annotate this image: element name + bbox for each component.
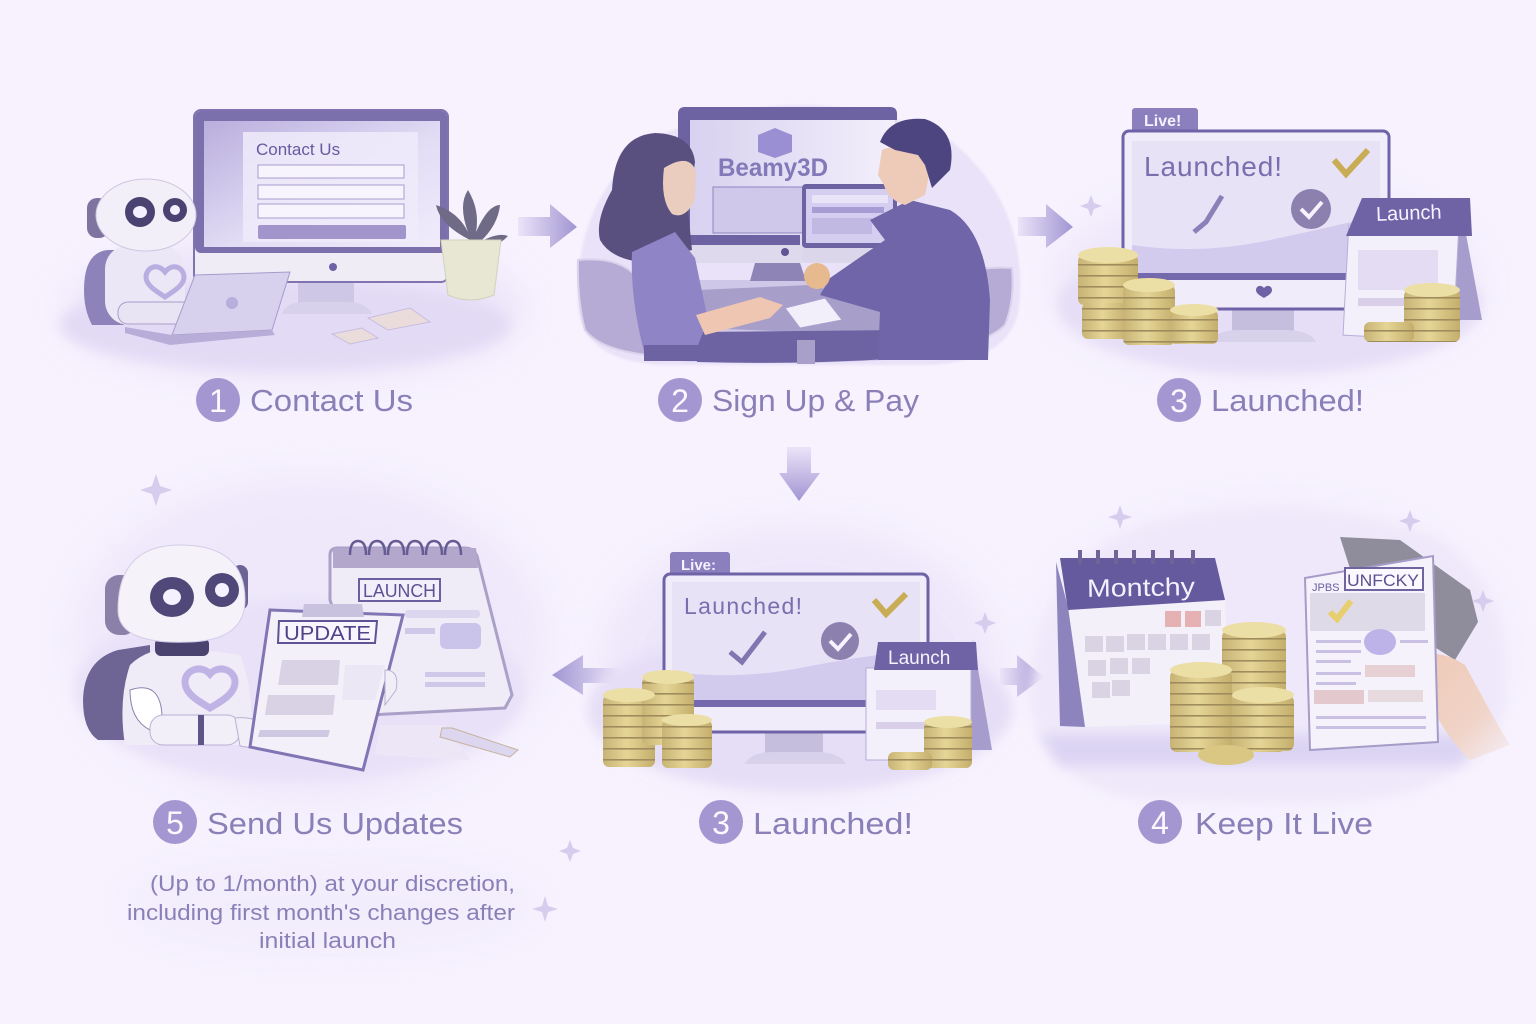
soft background washes: [65, 185, 1510, 960]
scene 3: launched bottom: [588, 552, 1012, 790]
update clipboard: [250, 604, 403, 770]
arrow: step 1 to 2: [518, 204, 577, 248]
step label 5: Send Us Updates: [207, 806, 463, 841]
contact form: [243, 132, 418, 242]
step label 3 top: [1157, 378, 1364, 422]
arrow: down: [779, 447, 820, 501]
keypad paper: [785, 298, 842, 328]
step label 2: 2: [671, 383, 689, 419]
decorative sparkles: [140, 195, 1494, 922]
desk: [697, 285, 906, 364]
live tag: Live!: [1144, 113, 1181, 130]
small monitor: [802, 184, 897, 262]
scene 3: launched top: [1058, 108, 1482, 373]
backdrop blob: [578, 105, 1020, 365]
cash and hand: [1340, 537, 1510, 760]
calendar: LAUNCH: [363, 581, 436, 601]
live tag: [670, 552, 730, 576]
step label 5: [153, 800, 463, 844]
arrow: centre to left: [552, 655, 620, 695]
calendar: [1343, 198, 1482, 341]
lower scene shading: [640, 280, 960, 363]
scene 2: sign up and pay: [578, 105, 1020, 365]
step label 1: [196, 378, 413, 422]
note text: including first month's changes after: [127, 900, 515, 925]
step label 2: [658, 378, 920, 422]
step label 2: Sign Up & Pay: [712, 383, 920, 418]
step label 5: 5: [166, 805, 184, 841]
calendar: [866, 640, 992, 760]
monitor: Launched!: [1144, 151, 1282, 182]
live tag: [1132, 108, 1198, 132]
newsletter: [1305, 556, 1438, 750]
step label 3 top: 3: [1170, 383, 1188, 419]
platform blob: [1058, 237, 1482, 373]
step label 1: Contact Us: [250, 383, 413, 418]
note text: initial launch: [259, 928, 396, 953]
ground shadow: [1040, 735, 1480, 765]
chairs: [578, 259, 1013, 355]
scene 5: send us updates: [75, 541, 525, 780]
icon: robot: [83, 545, 285, 748]
coin stacks: [1170, 622, 1294, 765]
coin stacks: [603, 670, 972, 770]
step label 1: 1: [209, 383, 227, 419]
coin stacks: [1078, 247, 1460, 345]
icon: potted plant: [436, 190, 508, 300]
papers: [332, 308, 430, 344]
scene 4: keep it live: [1030, 511, 1510, 800]
step label 4: Keep It Live: [1195, 806, 1373, 841]
monitor: [1123, 131, 1389, 342]
note paper and pen: [375, 725, 518, 760]
calendar: Launch: [1376, 202, 1442, 226]
large monitor: Beamy3D: [718, 154, 828, 182]
platform blob: [588, 630, 1012, 790]
live tag: Live:: [681, 557, 716, 574]
scene 1: contact us: [60, 110, 510, 370]
calendar: [330, 541, 512, 715]
man: [804, 119, 990, 360]
step label 3 top: Launched!: [1211, 383, 1364, 418]
note text: [127, 871, 515, 953]
newsletter: UNFCKY: [1347, 571, 1419, 590]
platform blob: [1030, 511, 1505, 800]
newsletter: JPBS: [1312, 582, 1340, 594]
icon: robot: [84, 179, 196, 325]
step label 3 bottom: Launched!: [753, 806, 913, 841]
step label 4: 4: [1151, 805, 1169, 841]
step label 4: [1138, 800, 1373, 844]
icon: laptop: [125, 272, 290, 345]
note text: (Up to 1/month) at your discretion,: [150, 871, 515, 896]
monitor: [194, 110, 448, 314]
update clipboard: UPDATE: [284, 623, 371, 645]
arrow: step 2 to 3: [1018, 204, 1073, 248]
monthly calendar: Montchy: [1087, 573, 1196, 603]
platform blob: [60, 280, 510, 370]
platform blob: [75, 600, 525, 780]
large monitor: [678, 107, 897, 281]
monthly calendar: [1056, 550, 1230, 727]
calendar: Launch: [888, 648, 950, 669]
monitor: [664, 574, 928, 764]
step label 3 bottom: [699, 800, 913, 844]
woman: [599, 133, 783, 361]
contact form: Contact Us: [256, 140, 340, 159]
monitor: Launched!: [684, 593, 802, 619]
arrow: centre to right: [1000, 655, 1044, 697]
step label 3 bottom: 3: [712, 805, 730, 841]
